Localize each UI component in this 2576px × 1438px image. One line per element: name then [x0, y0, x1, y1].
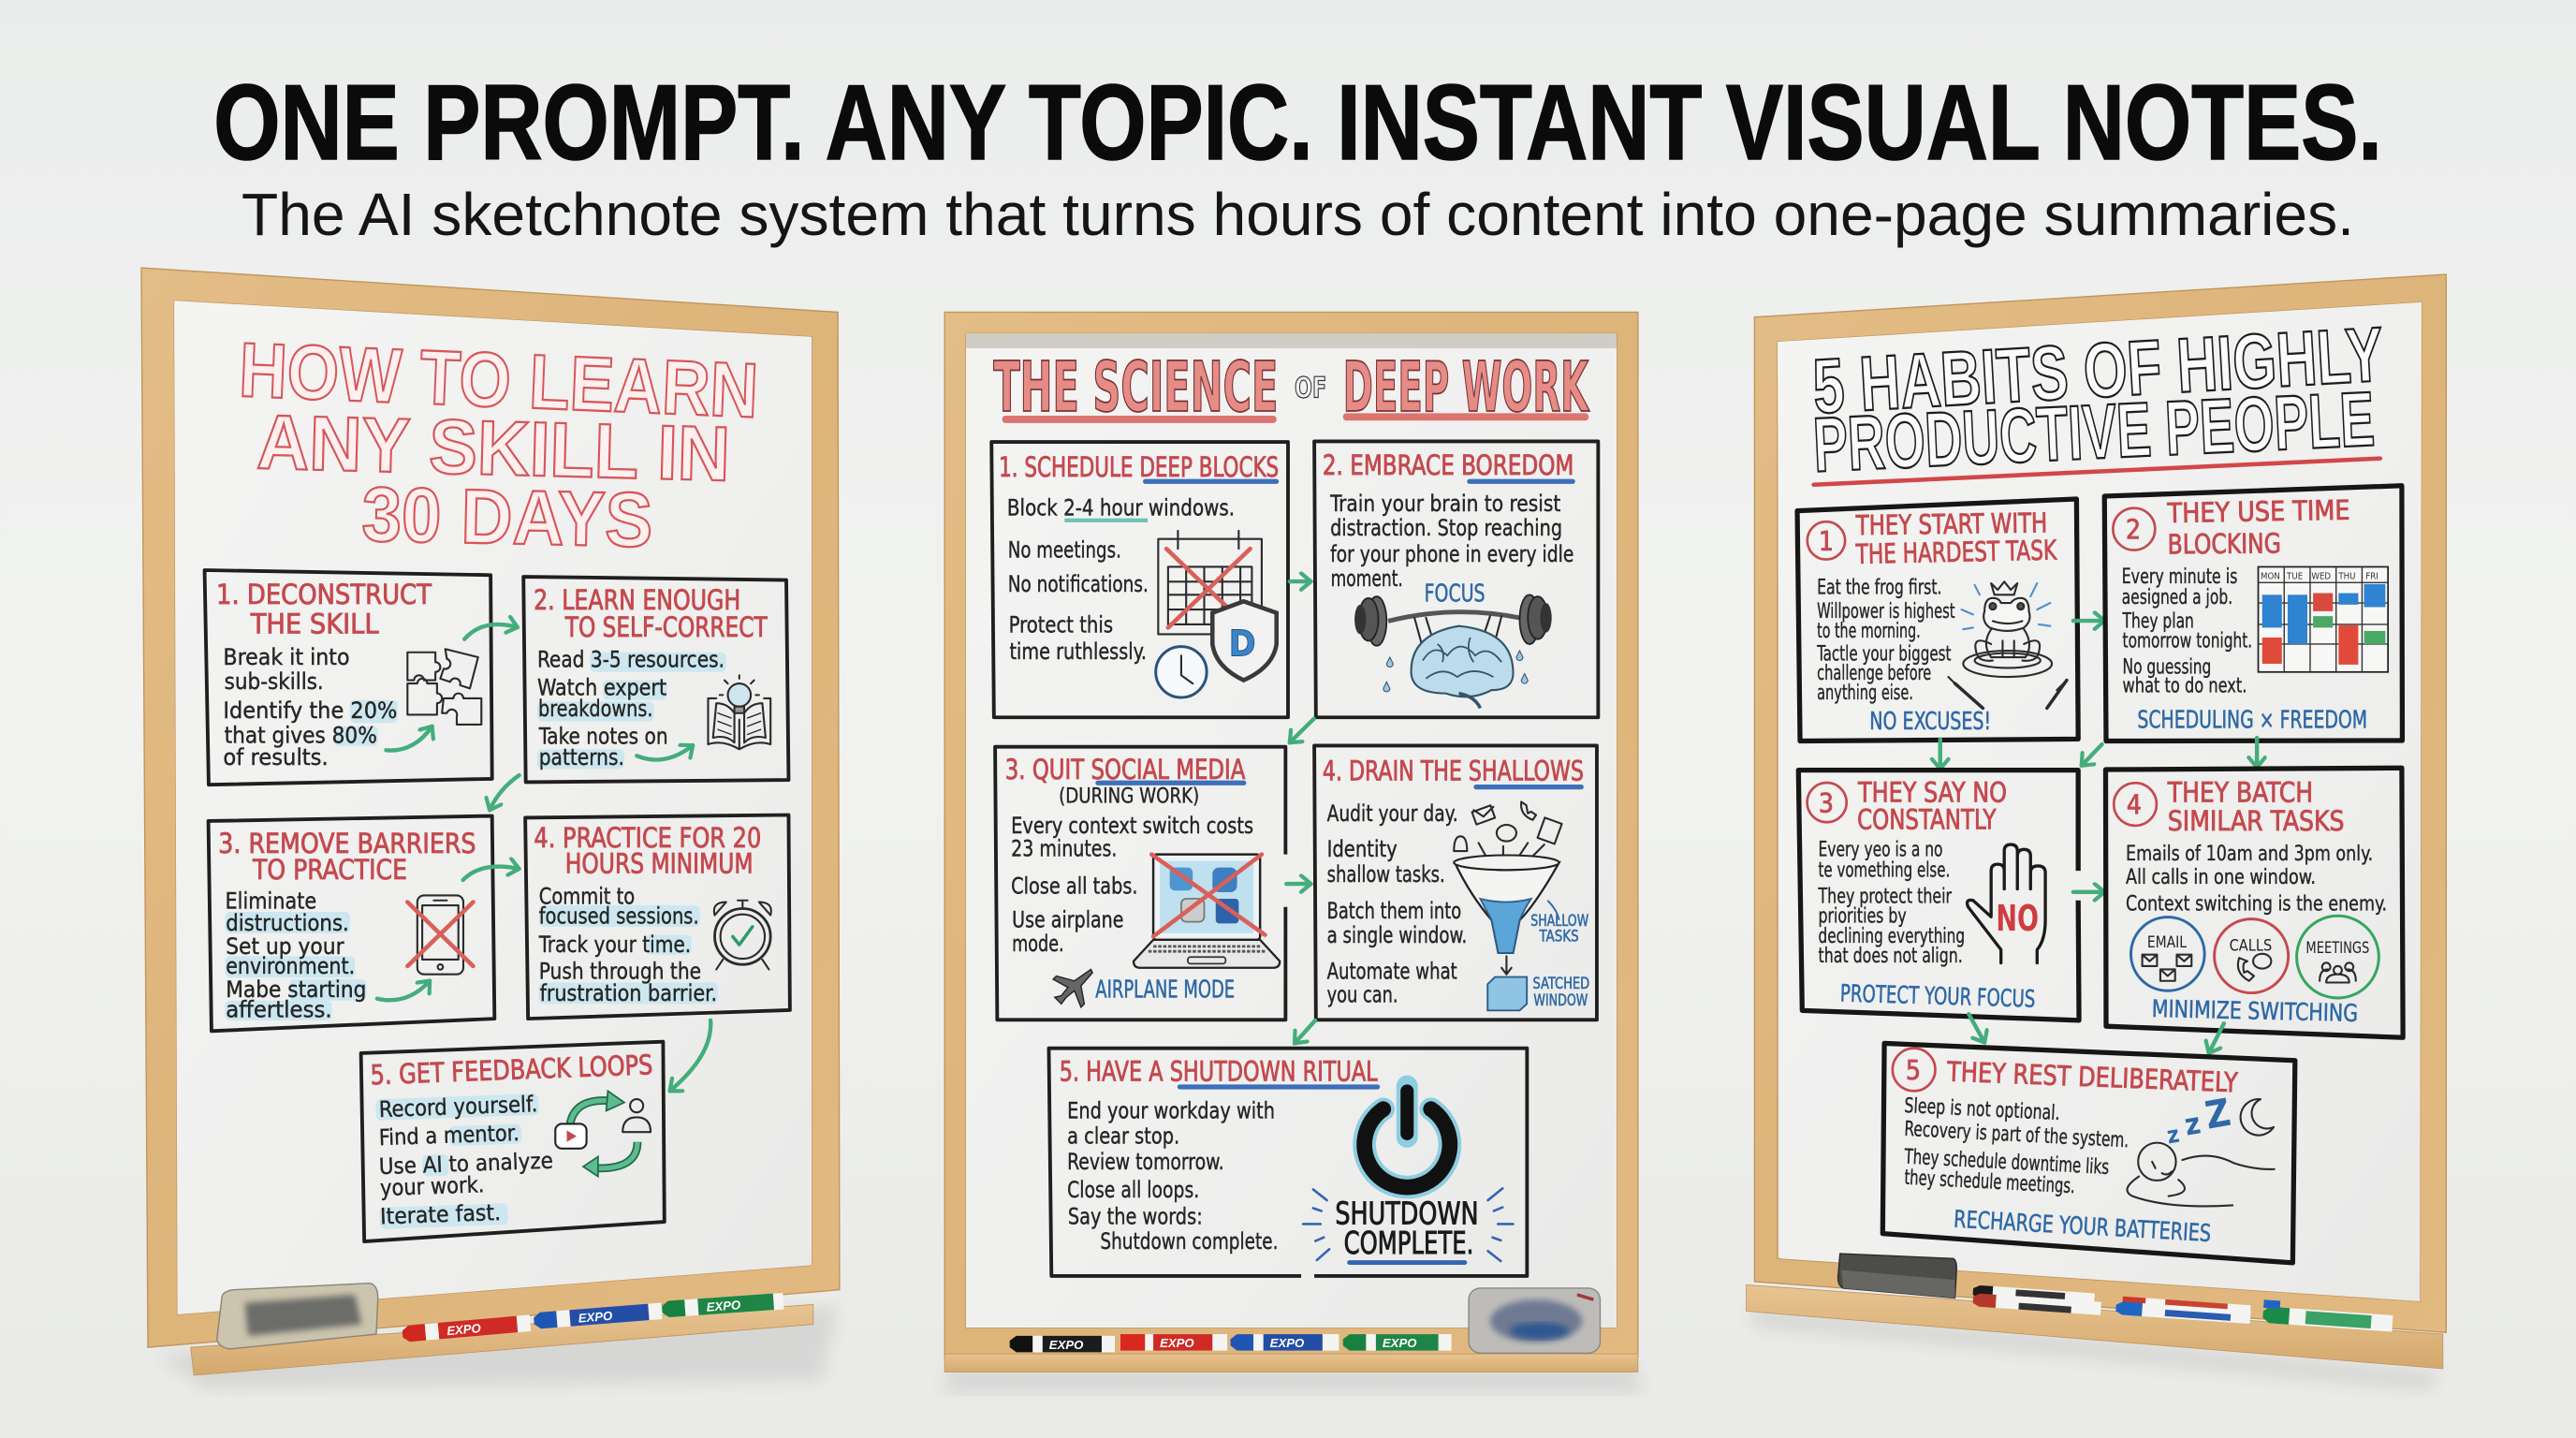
- box 4: drain the shallows: you can.: [1327, 982, 1398, 1008]
- box 3: quit social media: Every context switch costs: [1011, 813, 1253, 839]
- box 4: drain the shallows: shallow tasks.: [1327, 861, 1445, 888]
- box 5: rest deliberately: Recovery is part of the system.: [1904, 1118, 2130, 1152]
- subtitle: The AI sketchnote system that turns hours of content into one-page summaries.: [242, 181, 2354, 248]
- arrow: box 1 to box 2: [2073, 620, 2104, 622]
- box 3: remove barriers to practice: Eliminate: [225, 888, 316, 915]
- arrow: to book: [637, 745, 693, 760]
- icon: clock: [1156, 647, 1207, 697]
- arrow: box 2 to box 3: [1290, 719, 1314, 742]
- icon: alarm clock: [714, 901, 771, 969]
- box 1: schedule deep blocks: Protect this: [1009, 612, 1113, 638]
- box 3: quit social media: [995, 747, 1285, 1020]
- box 3: remove barriers to practice: [209, 816, 494, 1031]
- box 2: learn enough to self-correct: Read 3-5 resources.: [537, 647, 724, 673]
- marker: green: [662, 1293, 784, 1318]
- marker: blue: EXPO: [578, 1309, 614, 1326]
- arrow: box 3 to box 5: [1969, 1014, 1984, 1043]
- badge: calls: CALLS: [2230, 936, 2272, 954]
- box 5: rest deliberately: RECHARGE YOUR BATTERIES: [1953, 1205, 2212, 1247]
- box 5: rest deliberately: Sleep is not optional.: [1904, 1094, 2060, 1125]
- eraser: [1469, 1288, 1600, 1353]
- box 1: deconstruct the skill: of results.: [223, 744, 329, 770]
- board title: OF: [1295, 373, 1326, 405]
- icon: shield: D: [1229, 623, 1256, 665]
- box 2: use time blocking: SCHEDULING × FREEDOM: [2137, 705, 2367, 733]
- box 5: get feedback loops: 5. GET FEEDBACK LOOPS: [370, 1049, 653, 1091]
- marker: red: [402, 1314, 531, 1343]
- labels: funnel: SATCHED: [1532, 975, 1589, 992]
- box 1: deconstruct the skill: Break it into: [223, 644, 350, 670]
- box 1: start with hardest task: [1797, 499, 2078, 741]
- box 1: schedule deep blocks: Block 2-4 hour windows.: [1007, 495, 1235, 521]
- board frame: [1754, 274, 2446, 1332]
- box 2: use time blocking: tomorrow tonight.: [2123, 629, 2252, 653]
- box 1: start with hardest task: Tactle your biggest: [1816, 643, 1952, 667]
- arrow: box 1 to box 2: [1290, 580, 1311, 582]
- ledge: [944, 1354, 1638, 1372]
- box 1: start with hardest task: THEY START WITH: [1855, 506, 2047, 541]
- box 5: have a shutdown ritual: Say the words:: [1068, 1203, 1203, 1229]
- box 4: batch similar tasks: MINIMIZE SWITCHING: [2151, 994, 2359, 1027]
- box 5: get feedback loops: Record yourself.: [378, 1091, 538, 1123]
- icon: puzzle pieces: [407, 649, 481, 725]
- chart: weekly time-block calendar: THU: [2337, 572, 2356, 582]
- box 1: deconstruct the skill: that gives 80%: [225, 722, 377, 748]
- box 4: drain the shallows: Automate what: [1327, 958, 1457, 984]
- box 2: learn enough to self-correct: breakdowns.: [538, 696, 653, 722]
- box 3: say no constantly: that does not align.: [1819, 945, 1963, 968]
- box 2: learn enough to self-correct: patterns.: [539, 744, 624, 770]
- box 4: practice for 20 hours: focused sessions.: [539, 902, 699, 929]
- ledge: [1747, 1284, 2443, 1369]
- shutdown complete stamp: COMPLETE.: [1344, 1225, 1473, 1261]
- box 2: embrace boredom: distraction. Stop reaching: [1330, 515, 1562, 541]
- box 5: rest deliberately: THEY REST DELIBERATELY: [1946, 1055, 2238, 1098]
- box 2: use time blocking: THEY USE TIME: [2166, 494, 2350, 529]
- markers: black pair: [1972, 1284, 2101, 1315]
- panel: whiteboard 3, 5 habits of highly productive people: [1747, 274, 2446, 1390]
- icon: sleeping person: z: [2182, 1107, 2203, 1143]
- chart: weekly time-block calendar: [2259, 566, 2388, 672]
- arrow: box 2 to box 4: [2256, 738, 2258, 768]
- arrow: box 2 to box 3: [2082, 744, 2102, 766]
- box 5: have a shutdown ritual: 5. HAVE A SHUTDOWN RITUAL: [1060, 1055, 1378, 1087]
- labels: funnel: TASKS: [1539, 927, 1579, 945]
- box 3: quit social media: 3. QUIT SOCIAL MEDIA: [1005, 754, 1246, 785]
- badge: meetings: [2297, 916, 2378, 998]
- box 3: quit social media: Close all tabs.: [1011, 873, 1138, 900]
- badge: meetings: MEETINGS: [2305, 939, 2369, 957]
- box 3: remove barriers to practice: distructions.: [226, 910, 349, 936]
- box 2: use time blocking: 2: [2126, 515, 2141, 546]
- box 1: start with hardest task: to the morning.: [1817, 620, 1921, 643]
- board surface: [174, 301, 812, 1314]
- box 4: practice for 20 hours: HOURS MINIMUM: [565, 848, 754, 880]
- box 2: embrace boredom: [1314, 441, 1598, 717]
- box 3: say no constantly: THEY SAY NO: [1857, 776, 2007, 808]
- box 4: batch similar tasks: Emails of 10am and 3pm only.: [2126, 843, 2373, 866]
- chart: weekly time-block calendar: TUE: [2286, 572, 2303, 582]
- shutdown complete stamp: [1303, 1188, 1513, 1265]
- box 5: have a shutdown ritual: End your workday with: [1067, 1098, 1275, 1124]
- box 1: schedule deep blocks: No notifications.: [1008, 571, 1149, 597]
- box 5: rest deliberately: they schedule meetings.: [1904, 1167, 2075, 1198]
- box 5: get feedback loops: Use AI to analyze: [378, 1148, 553, 1180]
- box 2: use time blocking: aesigned a job.: [2122, 586, 2232, 609]
- arrow: box 4 to box 5: [670, 1020, 710, 1091]
- box 3: remove barriers to practice: affertless.: [226, 996, 332, 1022]
- box 4: practice for 20 hours: Commit to: [539, 883, 635, 909]
- box 4: drain the shallows: a single window.: [1327, 922, 1467, 948]
- box 4: drain the shallows: 4. DRAIN THE SHALLOWS: [1323, 756, 1584, 787]
- box 5: rest deliberately: 5: [1906, 1055, 1921, 1086]
- box 1: schedule deep blocks: [991, 442, 1288, 717]
- board title: 30 DAYS: [361, 471, 653, 564]
- board title: DEEP WORK: [1343, 348, 1590, 428]
- box 3: say no constantly: priorities by: [1819, 905, 1907, 929]
- box 5: have a shutdown ritual: [1048, 1049, 1527, 1276]
- icon: sleeping person: z: [2165, 1121, 2181, 1149]
- box 1: start with hardest task: challenge before: [1817, 662, 1931, 685]
- marker: red: EXPO: [446, 1321, 482, 1338]
- icon: power button: [1365, 1086, 1450, 1187]
- icon: sleeping person: Z: [2202, 1091, 2233, 1138]
- box 1: deconstruct the skill: 1. DECONSTRUCT: [216, 579, 432, 610]
- chart: weekly time-block calendar: FRI: [2365, 572, 2378, 582]
- box 2: embrace boredom: for your phone in every idle: [1330, 541, 1573, 567]
- box 4: practice for 20 hours: [525, 814, 790, 1019]
- box 3: quit social media: 23 minutes.: [1011, 835, 1117, 861]
- box 4: practice for 20 hours: Push through the: [539, 959, 701, 985]
- box 1: start with hardest task: NO EXCUSES!: [1869, 707, 1991, 735]
- box 2: learn enough to self-correct: [523, 577, 788, 782]
- box 3: quit social media: mode.: [1012, 931, 1064, 957]
- box 1: deconstruct the skill: sub-skills.: [225, 668, 324, 695]
- arrow: box 3 to box 4: [2073, 891, 2104, 893]
- box 5: get feedback loops: Find a mentor.: [378, 1120, 520, 1151]
- box 2: embrace boredom: moment.: [1331, 565, 1403, 592]
- arrow: box 2 to box 3: [490, 775, 520, 810]
- box 4: batch similar tasks: 4: [2127, 790, 2142, 821]
- box 1: start with hardest task: anything eise.: [1817, 682, 1913, 705]
- eraser: [1838, 1254, 1956, 1298]
- box 5: have a shutdown ritual: a clear stop.: [1067, 1123, 1179, 1149]
- box 5: get feedback loops: Iterate fast.: [380, 1199, 501, 1229]
- box 4: drain the shallows: [1314, 745, 1597, 1020]
- box 2: learn enough to self-correct: 2. LEARN ENOUGH: [534, 584, 740, 616]
- board surface: [1778, 302, 2422, 1301]
- arrow: box 3 to box 4: [463, 867, 520, 880]
- arrow: box 4 to box 5: [1295, 1020, 1315, 1043]
- box 5: have a shutdown ritual: Close all loops.: [1067, 1177, 1199, 1203]
- badge: calls: [2215, 919, 2289, 993]
- box 2: use time blocking: Every minute is: [2122, 565, 2237, 589]
- box 4: practice for 20 hours: frustration barrier.: [540, 980, 717, 1006]
- box 2: use time blocking: what to do next.: [2123, 675, 2247, 698]
- box 2: use time blocking: [2104, 486, 2402, 741]
- icon: crossed-out laptop: [1134, 855, 1280, 968]
- box 3: quit social media: (DURING WORK): [1059, 785, 1199, 809]
- box 3: say no constantly: te vomething else.: [1819, 858, 1950, 882]
- box 3: say no constantly: 3: [1819, 788, 1834, 819]
- panel: whiteboard 1, how to learn any skill: [141, 268, 840, 1388]
- icon: funnel with tasks: [1454, 801, 1562, 1010]
- board surface: [966, 333, 1617, 1328]
- board title: ANY SKILL IN: [256, 399, 731, 497]
- shutdown complete stamp: SHUTDOWN: [1335, 1195, 1479, 1231]
- board title: [238, 327, 760, 564]
- box 2: learn enough to self-correct: TO SELF-CORRECT: [564, 611, 768, 643]
- box 3: remove barriers to practice: TO PRACTICE: [252, 854, 407, 886]
- box 4: batch similar tasks: SIMILAR TASKS: [2168, 805, 2344, 837]
- box 4: drain the shallows: Batch them into: [1327, 898, 1461, 924]
- box 2: embrace boredom: Train your brain to resist: [1329, 491, 1560, 517]
- marker: blue: [1231, 1334, 1339, 1351]
- labels: funnel: WINDOW: [1533, 991, 1588, 1009]
- box 1: schedule deep blocks: time ruthlessly.: [1010, 638, 1147, 665]
- box 3: say no constantly: Every yeo is a no: [1819, 838, 1943, 861]
- board title: [1810, 311, 2386, 489]
- box 2: learn enough to self-correct: Take notes on: [538, 723, 668, 749]
- box 2: embrace boredom: 2. EMBRACE BOREDOM: [1323, 449, 1573, 481]
- box 1: deconstruct the skill: [205, 570, 492, 785]
- marker: green: [2262, 1299, 2393, 1331]
- box 3: say no constantly: [1798, 770, 2079, 1020]
- box 3: remove barriers to practice: environment.: [226, 953, 355, 979]
- box 5: get feedback loops: your work.: [380, 1171, 485, 1201]
- box 1: start with hardest task: THE HARDEST TASK: [1854, 534, 2057, 570]
- icon: stop hand: NO: [1996, 898, 2039, 940]
- arrow: to phone: [377, 981, 430, 1000]
- box 3: quit social media: Use airplane: [1012, 907, 1123, 933]
- marker: blue: EXPO: [1270, 1336, 1305, 1350]
- labels: funnel: SHALLOW: [1530, 912, 1588, 930]
- box 3: remove barriers to practice: Mabe starting: [226, 976, 366, 1003]
- icon: airplane: [1053, 969, 1092, 1007]
- box 2: embrace boredom: FOCUS: [1425, 579, 1486, 607]
- icon: sleeping person: [2127, 1091, 2275, 1206]
- marker: black: EXPO: [1049, 1338, 1084, 1352]
- box 2: use time blocking: BLOCKING: [2168, 527, 2281, 560]
- box 4: drain the shallows: Audit your day.: [1327, 800, 1458, 827]
- icon: brain lifting barbell: [1354, 594, 1552, 708]
- arrow: box 1 to box 3: [1939, 740, 1941, 769]
- markers: red and blue: [2115, 1297, 2251, 1324]
- arrow: to puzzle: [386, 726, 432, 751]
- board title: THE SCIENCE: [993, 348, 1278, 428]
- box 4: batch similar tasks: THEY BATCH: [2167, 776, 2313, 808]
- chart: weekly time-block calendar: WED: [2311, 572, 2331, 582]
- marker: green: [1343, 1334, 1452, 1351]
- icon: crossed-out phone: [407, 895, 474, 975]
- box 5: rest deliberately: [1882, 1043, 2295, 1263]
- chart: weekly time-block calendar: MON: [2261, 572, 2280, 582]
- icon: shield: [1212, 601, 1277, 681]
- board title: HOW TO LEARN: [238, 327, 760, 434]
- box 2: use time blocking: No guessing: [2123, 656, 2211, 680]
- box 3: remove barriers to practice: 3. REMOVE BARRIERS: [218, 828, 476, 859]
- badge: email: [2131, 917, 2204, 990]
- box 4: drain the shallows: Identity: [1327, 836, 1398, 862]
- arrow: box 4 to box 5: [2209, 1023, 2224, 1053]
- icon: feedback loop: [555, 1091, 651, 1177]
- box 1: deconstruct the skill: THE SKILL: [250, 608, 379, 639]
- badge: email: EMAIL: [2147, 933, 2188, 951]
- marker: green: EXPO: [706, 1298, 741, 1314]
- label: airplane mode: AIRPLANE MODE: [1095, 975, 1235, 1003]
- box 4: batch similar tasks: Context switching is the enemy.: [2126, 892, 2387, 916]
- marker: red: EXPO: [1160, 1336, 1194, 1350]
- ledge: [191, 1304, 813, 1375]
- box 3: say no constantly: They protect their: [1818, 886, 1953, 909]
- eraser: [217, 1284, 378, 1349]
- box 4: practice for 20 hours: Track your time.: [538, 932, 691, 958]
- board frame: [944, 312, 1638, 1357]
- box 4: batch similar tasks: [2105, 768, 2403, 1037]
- box 3: say no constantly: declining everything: [1819, 925, 1965, 948]
- icon: open book with light bulb: [708, 675, 770, 749]
- box 4: batch similar tasks: All calls in one window.: [2126, 866, 2316, 889]
- box 1: start with hardest task: 1: [1819, 526, 1834, 557]
- icon: stop hand: [1968, 844, 2045, 962]
- marker: blue: [534, 1303, 663, 1329]
- box 1: start with hardest task: Willpower is highest: [1817, 600, 1955, 624]
- box 3: say no constantly: PROTECT YOUR FOCUS: [1840, 979, 2036, 1013]
- arrow: box 1 to box 2: [464, 624, 518, 639]
- box 1: schedule deep blocks: 1. SCHEDULE DEEP BLOCKS: [999, 451, 1279, 483]
- board frame: [141, 268, 840, 1347]
- marker: green: EXPO: [1383, 1336, 1417, 1350]
- icon: calendar crossed out: [1158, 531, 1262, 634]
- arrow: box 3 to box 4: [1286, 883, 1311, 885]
- box 5: rest deliberately: They schedule downtime liks: [1903, 1146, 2110, 1180]
- icon: frog on a plate: [1949, 581, 2067, 708]
- marker: red: [1120, 1334, 1227, 1351]
- box 5: get feedback loops: [361, 1042, 665, 1241]
- box 1: start with hardest task: Eat the frog first.: [1817, 576, 1942, 599]
- labels: funnel: [1530, 912, 1589, 1009]
- box 3: say no constantly: CONSTANTLY: [1857, 804, 1997, 836]
- panel: whiteboard 2, the science of deep work: [943, 312, 1643, 1393]
- box 5: have a shutdown ritual: Shutdown complete.: [1100, 1228, 1278, 1255]
- box 2: use time blocking: They plan: [2122, 609, 2194, 633]
- box 5: have a shutdown ritual: Review tomorrow.: [1067, 1149, 1224, 1175]
- box 4: practice for 20 hours: 4. PRACTICE FOR 20: [534, 822, 761, 854]
- box 3: remove barriers to practice: Set up your: [226, 933, 344, 960]
- box 1: deconstruct the skill: Identify the 20%: [223, 697, 397, 724]
- box 1: schedule deep blocks: No meetings.: [1008, 537, 1121, 564]
- box 2: learn enough to self-correct: Watch expert: [537, 674, 666, 700]
- marker: black: [1010, 1336, 1115, 1352]
